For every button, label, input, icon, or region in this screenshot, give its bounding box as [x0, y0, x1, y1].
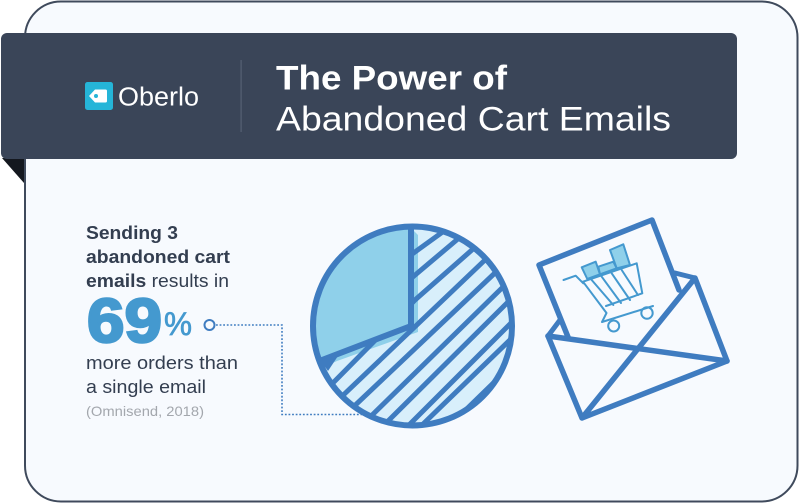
pie slice: solid: [313, 226, 418, 368]
big number: 69%: [87, 287, 192, 356]
pie slice: hatched: [332, 232, 509, 422]
text block: statistic lead-in: [86, 222, 230, 291]
dotted connector: [204, 320, 362, 414]
title: [276, 60, 671, 138]
text block: statistic conclusion: a single email: [86, 376, 206, 397]
pie outline and dividers: [313, 226, 512, 426]
header divider: [240, 60, 242, 132]
title: Abandoned Cart Emails: [276, 100, 671, 138]
icon: Oberlo tag logo: [85, 82, 113, 110]
shopping cart items: [582, 244, 630, 279]
header fold: [2, 158, 24, 183]
pie chart: [312, 226, 530, 440]
text block: statistic conclusion: [86, 352, 238, 397]
text block: statistic lead-in: abandoned cart: [86, 246, 230, 267]
text block: statistic lead-in: emails results in: [86, 270, 229, 291]
envelope back flap: [548, 273, 695, 336]
text block: statistic lead-in: Sending 3: [86, 222, 178, 243]
pie crescent: [464, 381, 492, 408]
icon: open envelope with shopping cart letter: [539, 220, 727, 418]
letter: [539, 220, 679, 337]
text block: statistic conclusion: more orders than: [86, 352, 238, 373]
header banner: [1, 33, 737, 159]
source citation: (Omnisend, 2018): [86, 403, 204, 419]
envelope front: [548, 278, 727, 418]
title: The Power of: [276, 60, 508, 98]
shopping cart: [564, 263, 653, 332]
big number: 69%: %: [164, 306, 192, 342]
big number: 69%: 69: [87, 287, 162, 356]
divider end wedge: [320, 356, 338, 371]
logo wordmark: Oberlo: [118, 84, 199, 112]
